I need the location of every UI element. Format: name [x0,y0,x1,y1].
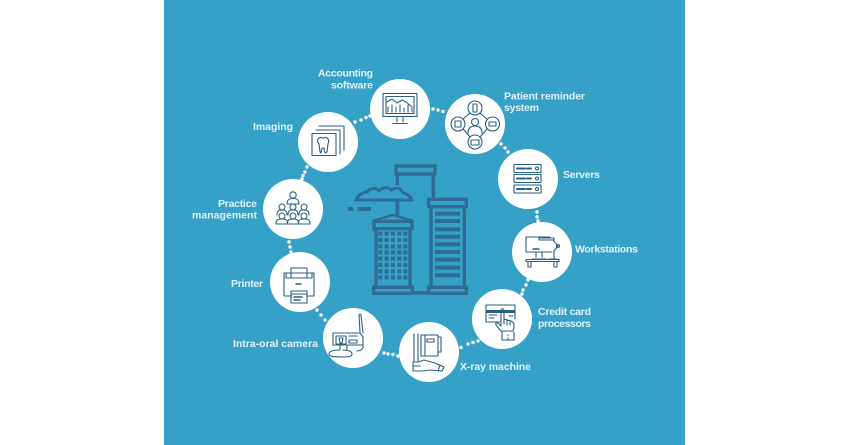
central building illustration [348,166,466,295]
label: Patient reminder [504,90,585,102]
label: Imaging [253,121,293,133]
label: Accounting [318,68,373,80]
left building windows [378,232,407,279]
icon: group of people [276,192,310,224]
icon: monitor with chart [383,94,417,124]
dotted connectors ring [287,107,540,358]
icon: server rack [514,164,541,193]
back tower [396,166,435,198]
icon: printer [284,268,314,303]
label line 2: processors [538,318,591,330]
pole [395,200,399,216]
circle [472,289,532,349]
label: Printer [231,278,263,290]
label: Intra-oral camera [233,338,318,350]
node: servers [498,149,600,209]
label: Servers [563,169,600,181]
smoke dashes [348,207,371,211]
circle [263,179,323,239]
cloud [356,188,412,200]
circle [445,94,505,154]
label line 2: system [504,102,539,114]
icon: hand on credit card [486,305,515,340]
circle [270,252,330,312]
circle [512,222,572,282]
label: Credit card [538,306,591,318]
label: X-ray machine [460,361,531,373]
left building [373,215,413,221]
node: credit card processors [472,289,591,349]
node: practice management [192,179,323,239]
blue background panel [164,0,685,445]
node: accounting software [318,68,430,139]
icon: desk with monitor and lamp [526,237,560,267]
icon: person with four devices [451,101,500,149]
node: intra-oral camera [233,308,383,368]
node: patient reminder system [445,90,585,154]
node: printer [231,252,330,312]
node: x-ray machine [399,322,531,382]
circle [399,322,459,382]
label: Practice [218,198,257,210]
ground link [413,291,429,295]
circle [323,308,383,368]
circle [370,79,430,139]
label: Workstations [575,244,638,256]
right building stripes [435,212,460,277]
label line 2: software [331,80,373,92]
icon: x-ray machine [413,334,444,371]
node: workstations [512,222,638,282]
circle [498,149,558,209]
icon: stacked x-ray films with tooth [312,126,344,156]
node: imaging [253,112,358,172]
label line 2: management [192,210,258,222]
right building [429,199,466,293]
icon: intra-oral camera unit [329,314,363,357]
circle [298,112,358,172]
